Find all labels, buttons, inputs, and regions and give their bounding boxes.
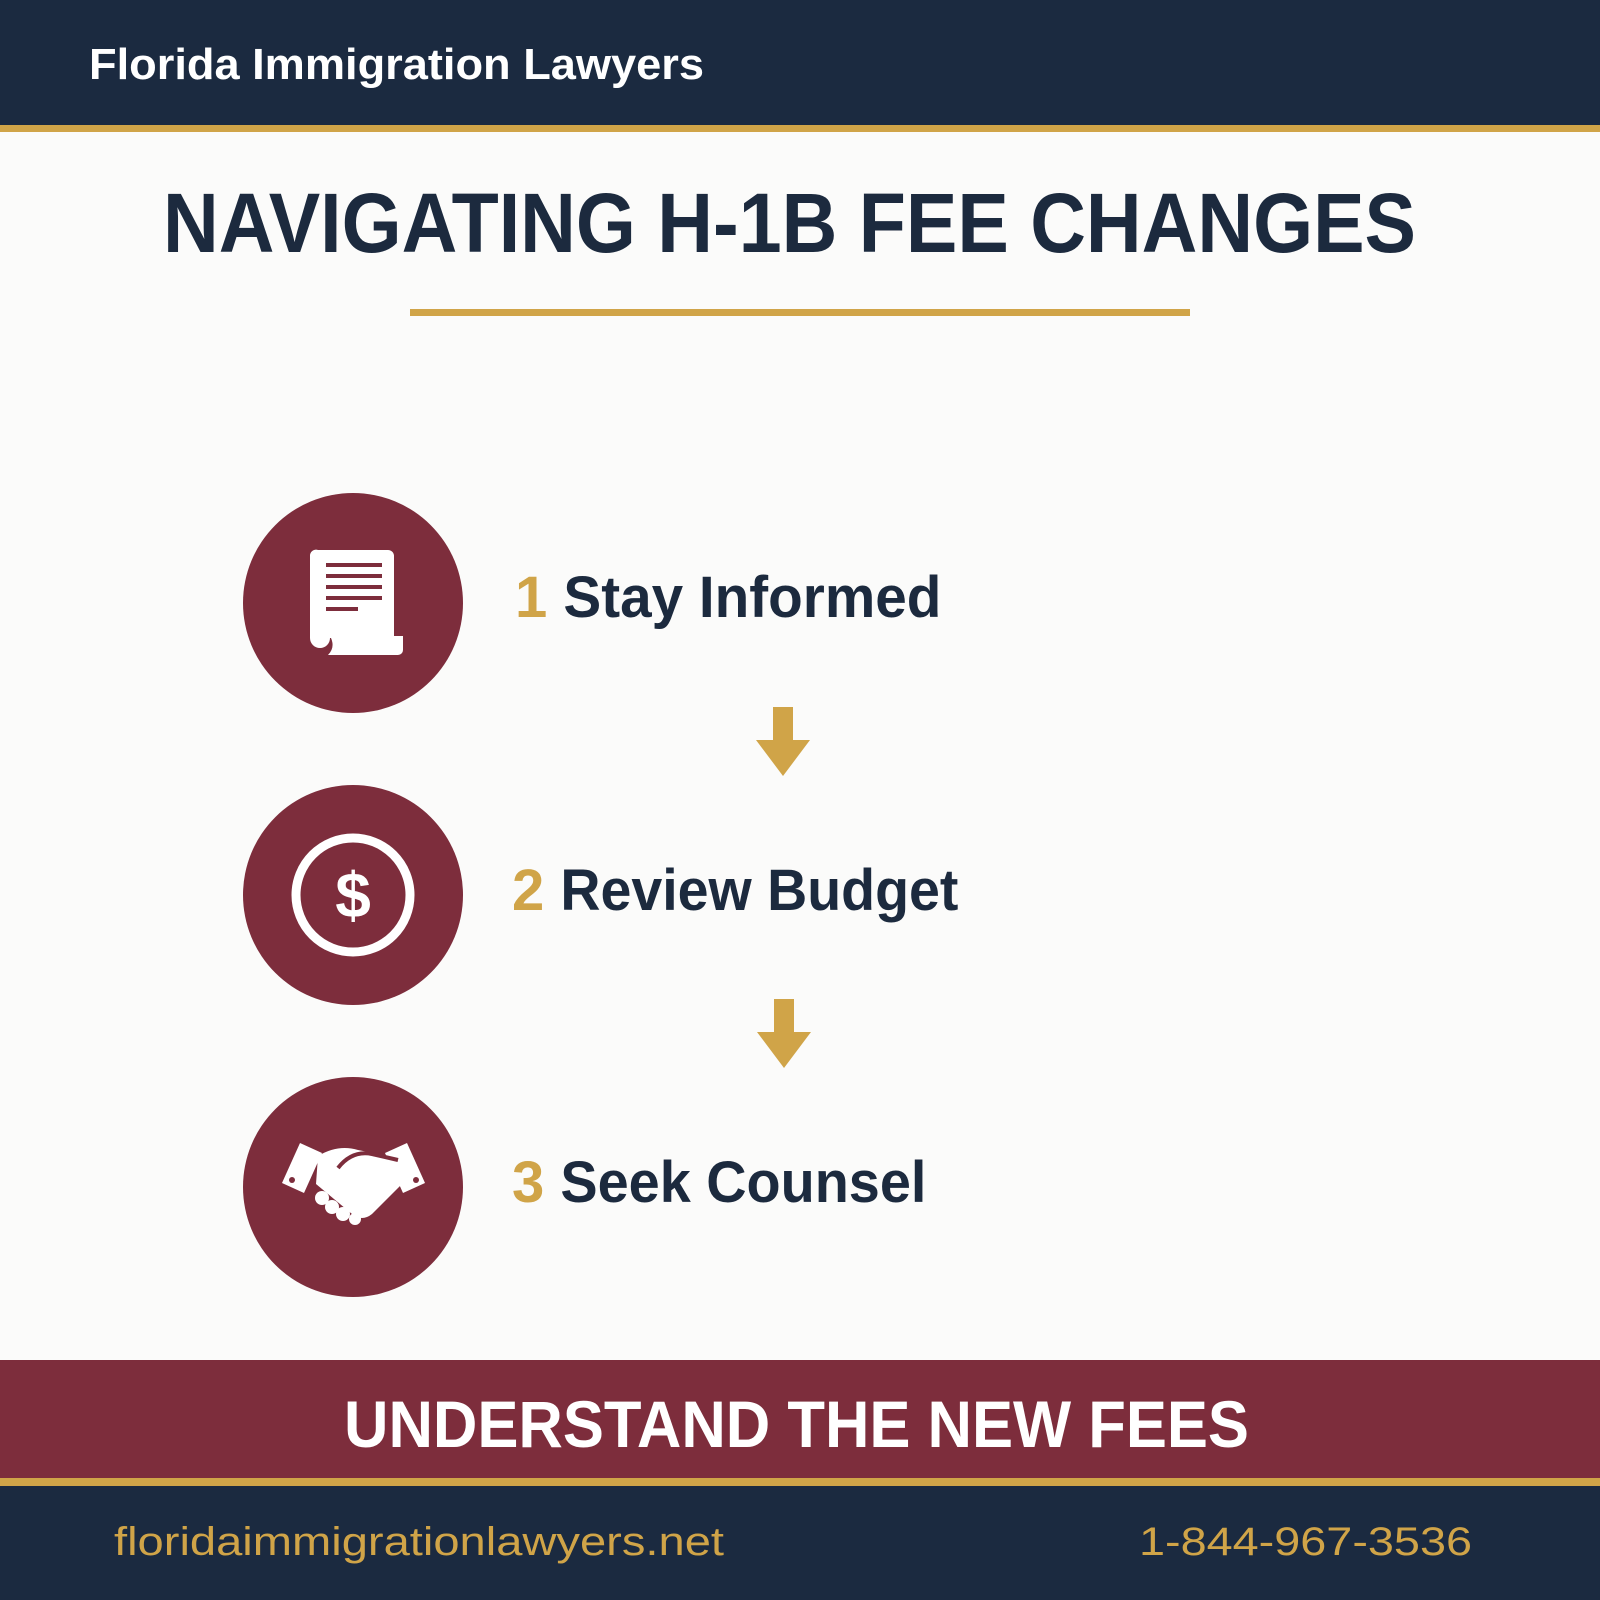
icon: dollar coin: $ — [335, 859, 371, 931]
step 3 label: 3 Seek Counsel — [512, 1150, 926, 1215]
arrow 2 — [757, 999, 811, 1068]
footer — [0, 1478, 1600, 1600]
footer website: floridaimmigrationlawyers.net — [114, 1520, 724, 1564]
step 1 label: 1 Stay Informed — [515, 565, 941, 630]
step 3 — [243, 1077, 926, 1297]
icon: document — [243, 493, 463, 713]
step 2 — [243, 785, 958, 1005]
footer phone: 1-844-967-3536 — [1139, 1520, 1472, 1564]
header bar — [0, 0, 1600, 132]
step 2 label: 2 Review Budget — [512, 858, 958, 923]
title underline — [410, 309, 1190, 316]
title: NAVIGATING H-1B FEE CHANGES — [163, 176, 1416, 270]
arrow 1 — [756, 707, 810, 776]
icon: dollar coin — [243, 785, 463, 1005]
banner: understand the new fees — [0, 1360, 1600, 1478]
header brand text: Florida Immigration Lawyers — [89, 40, 704, 89]
step 1 — [243, 493, 941, 713]
icon: handshake — [243, 1077, 463, 1297]
banner: understand the new fees: UNDERSTAND THE NEW FEES — [344, 1387, 1249, 1461]
